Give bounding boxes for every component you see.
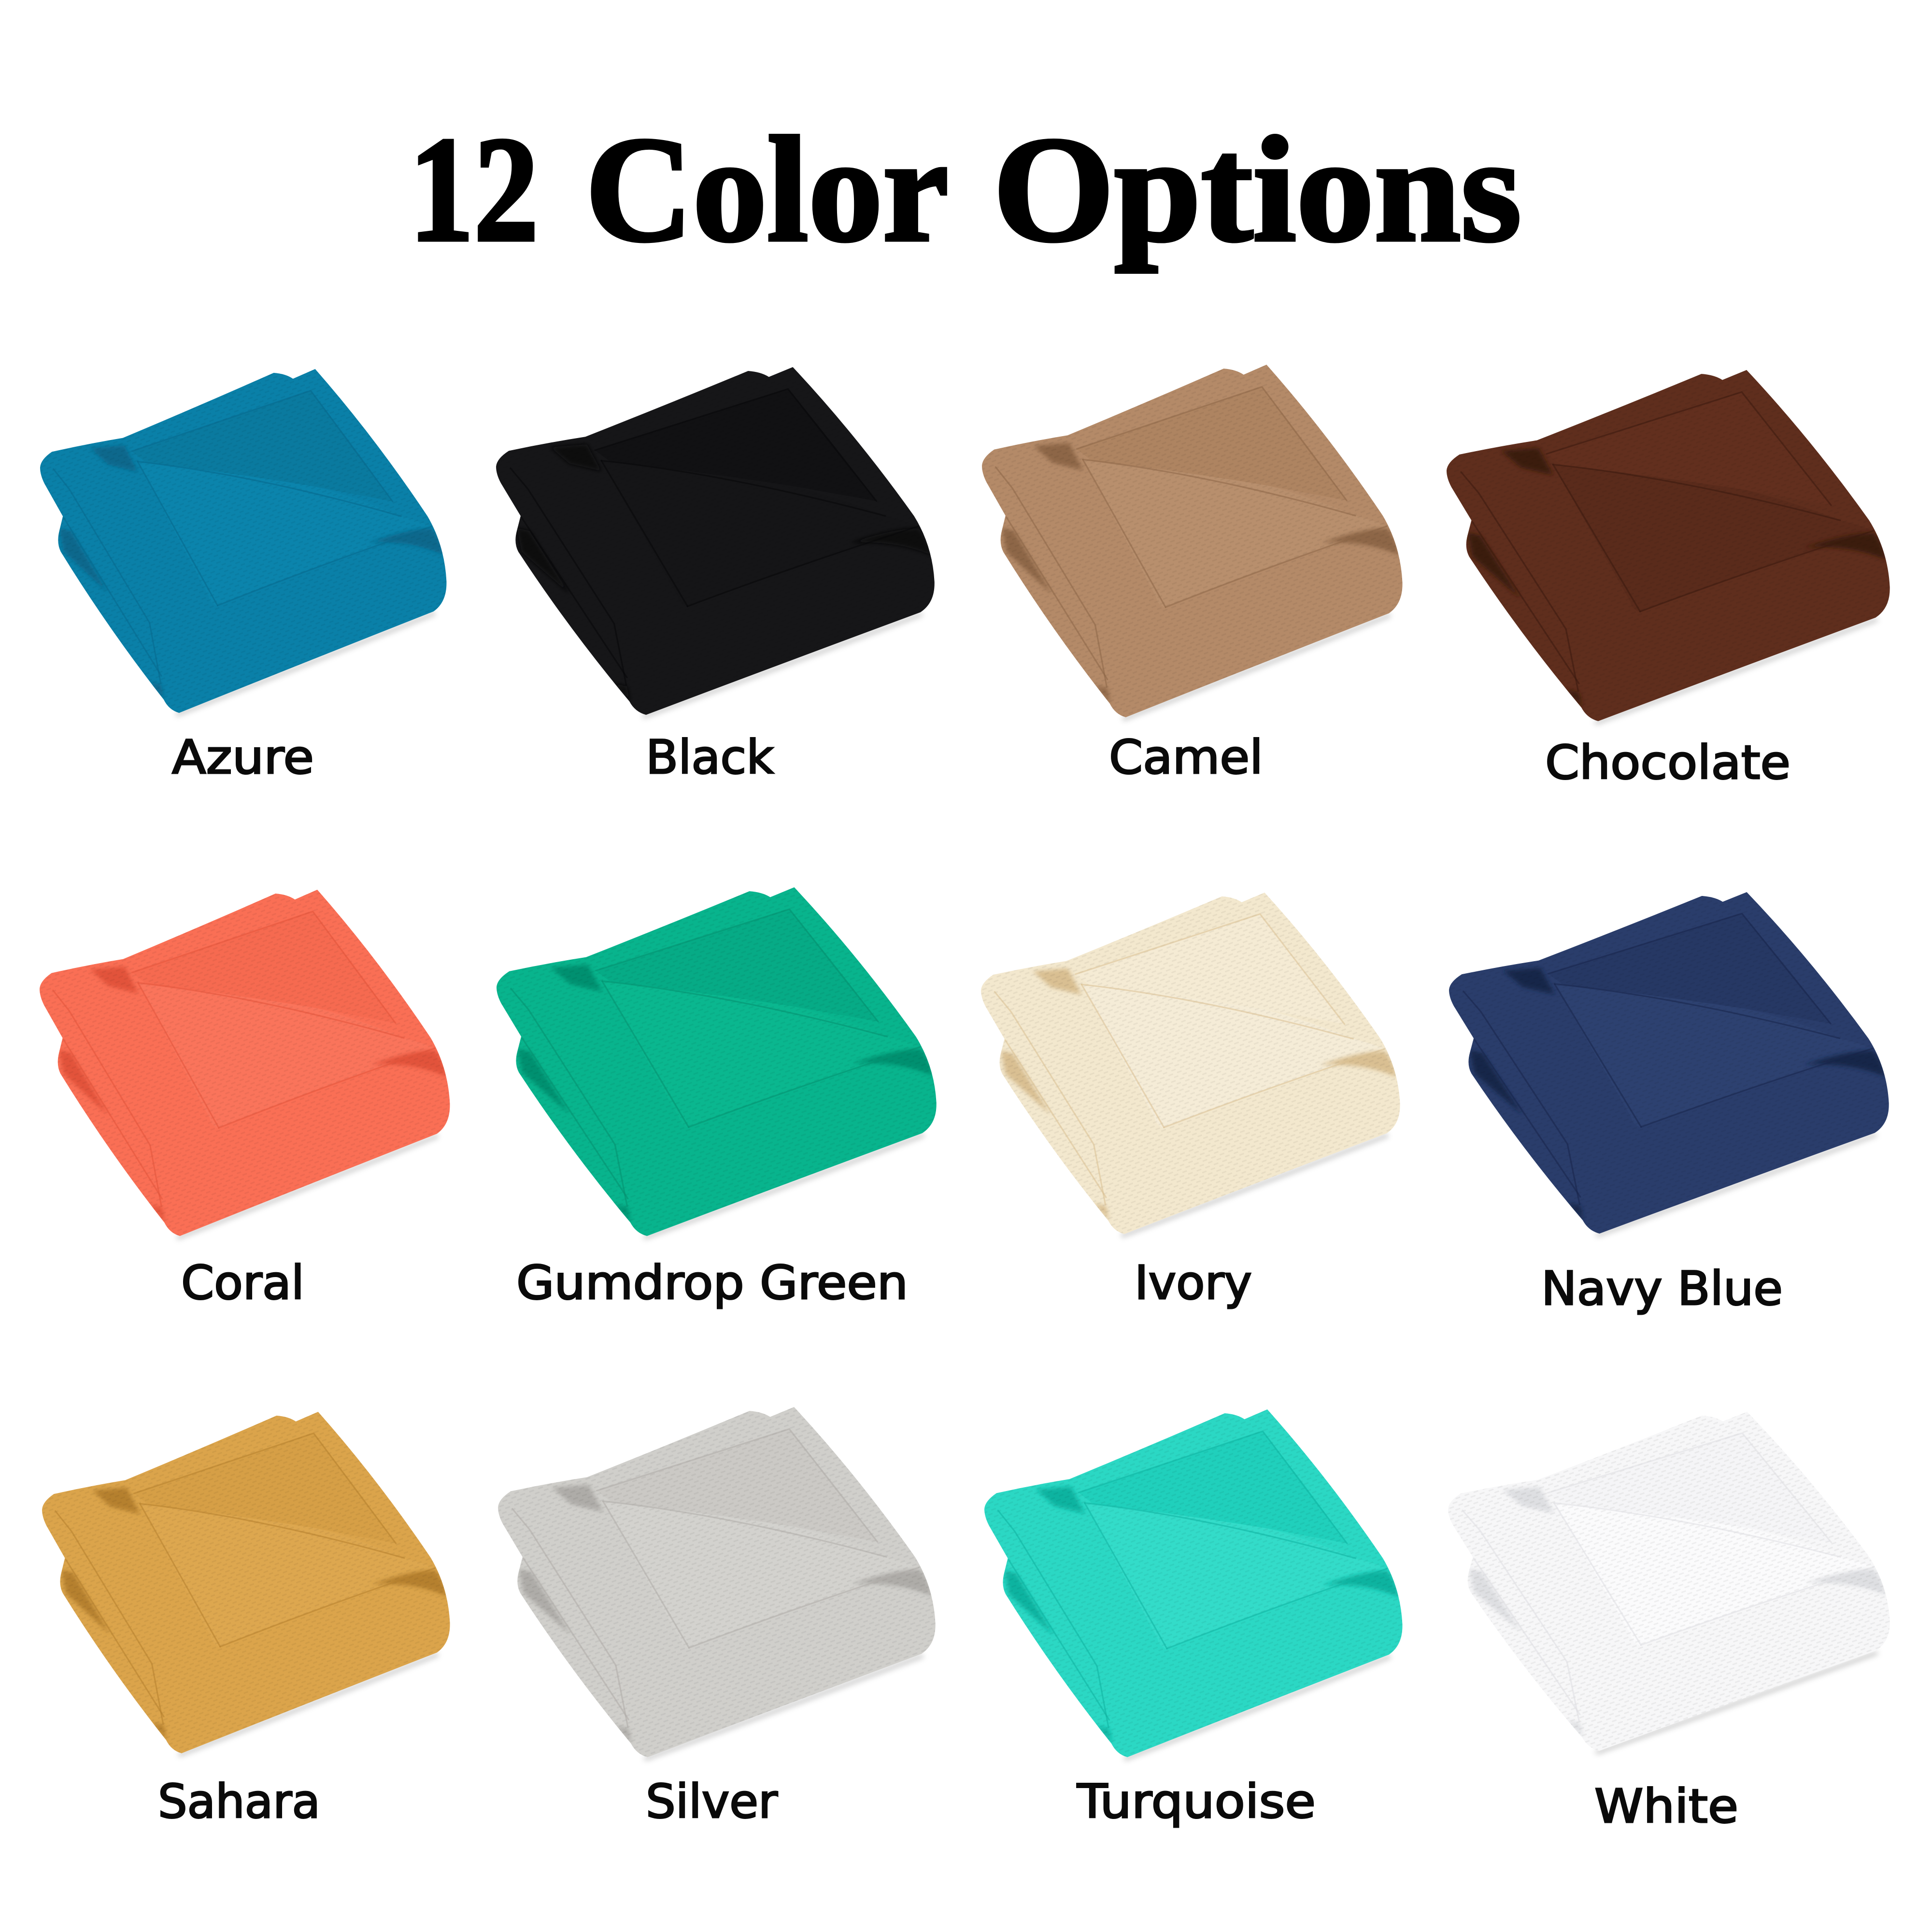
panel: Azure blanket bbox=[40, 369, 446, 784]
title: 12 bbox=[409, 106, 539, 273]
icon: ivory folded blanket bbox=[981, 893, 1400, 1236]
panel: Camel blanket bbox=[982, 365, 1403, 784]
label: Ivory: Ivory bbox=[1135, 1256, 1252, 1310]
icon: turquoise folded blanket bbox=[984, 1409, 1403, 1759]
label: Sahara: Sahara bbox=[158, 1775, 320, 1829]
icon: white folded blanket bbox=[1448, 1412, 1890, 1753]
panel: Chocolate blanket bbox=[1447, 370, 1890, 790]
icon: black folded blanket bbox=[496, 367, 935, 717]
label: White: White bbox=[1594, 1779, 1738, 1833]
label: Azure: Azure bbox=[172, 730, 314, 784]
panel: Sahara blanket bbox=[42, 1412, 450, 1829]
icon: sahara folded blanket bbox=[42, 1412, 450, 1755]
label: Black: Black bbox=[646, 730, 774, 784]
label: Navy Blue: Navy Blue bbox=[1541, 1262, 1783, 1316]
icon: camel folded blanket bbox=[982, 365, 1403, 719]
icon: silver folded blanket bbox=[498, 1407, 936, 1759]
label: Chocolate: Chocolate bbox=[1545, 736, 1790, 790]
panel: Turquoise blanket bbox=[984, 1409, 1403, 1829]
panel: Navy Blue blanket bbox=[1449, 892, 1889, 1316]
icon: gumdrop green folded blanket bbox=[497, 887, 937, 1238]
label: Turquoise: Turquoise bbox=[1077, 1775, 1316, 1829]
panel: Gumdrop Green blanket bbox=[497, 887, 937, 1310]
panel: Silver blanket bbox=[498, 1407, 936, 1829]
icon: coral folded blanket bbox=[40, 890, 450, 1238]
title bbox=[409, 106, 1521, 273]
icon: navy blue folded blanket bbox=[1449, 892, 1889, 1236]
panel: White blanket bbox=[1448, 1412, 1890, 1833]
panel: Black blanket bbox=[496, 367, 935, 784]
label: Coral: Coral bbox=[181, 1256, 304, 1310]
panel: Coral blanket bbox=[40, 890, 450, 1310]
icon: chocolate folded blanket bbox=[1447, 370, 1890, 723]
title: Color bbox=[585, 106, 949, 273]
icon: azure folded blanket bbox=[40, 369, 446, 715]
label: Camel: Camel bbox=[1109, 730, 1263, 784]
title: Options bbox=[993, 106, 1521, 273]
panel: Ivory blanket bbox=[981, 893, 1400, 1310]
label: Silver: Silver bbox=[646, 1775, 778, 1829]
label: Gumdrop Green: Gumdrop Green bbox=[516, 1256, 908, 1310]
